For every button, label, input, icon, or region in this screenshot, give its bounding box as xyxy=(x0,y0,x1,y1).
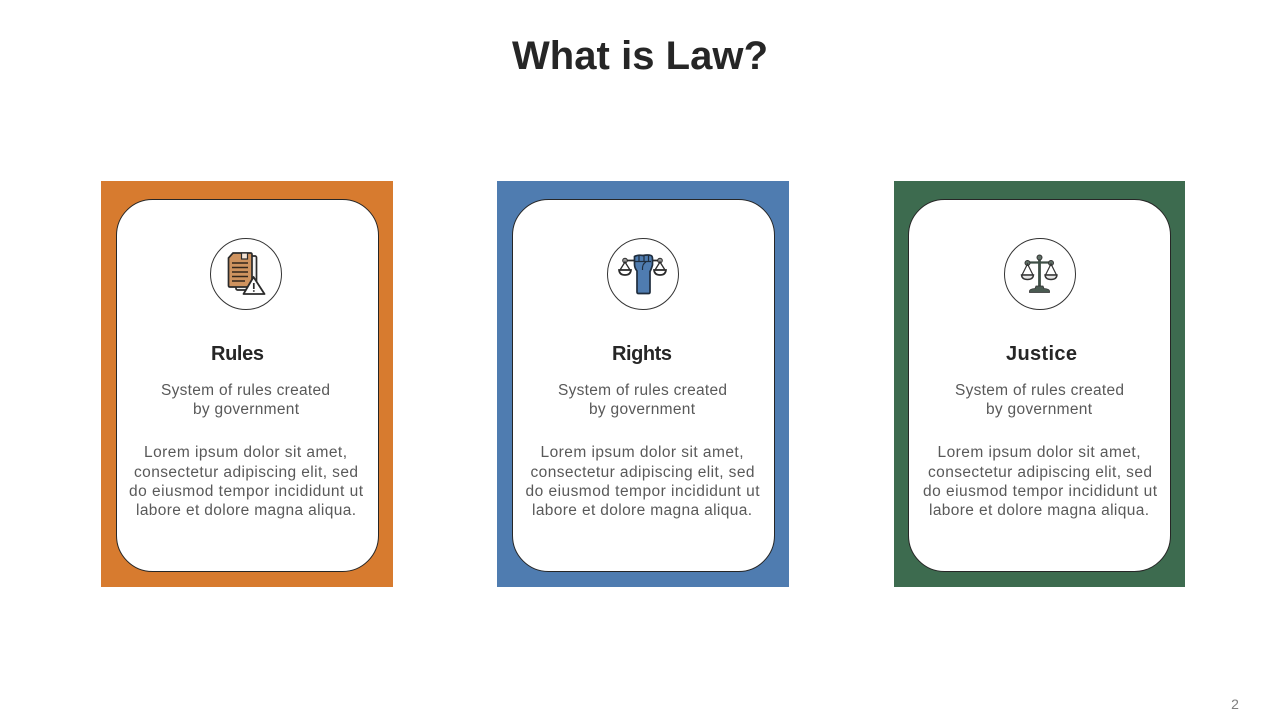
body text: justice: Lorem ipsum dolor sit amet, xyxy=(938,444,1140,461)
body text: rights: Lorem ipsum dolor sit amet, xyxy=(540,444,744,461)
heading: rights: Rights xyxy=(612,343,672,365)
page number: 2 xyxy=(1231,696,1239,712)
title: What is Law? xyxy=(512,34,768,78)
card frame: rights xyxy=(497,181,789,587)
card frame: justice xyxy=(894,181,1185,587)
subtitle: rules xyxy=(161,382,330,418)
card inner: rules xyxy=(116,200,378,572)
panel: justice xyxy=(894,181,1185,587)
heading: rules: Rules xyxy=(211,343,264,365)
card inner: justice xyxy=(908,200,1170,572)
panel: rights xyxy=(497,181,789,587)
body text: rights: labore et dolore magna aliqua. xyxy=(532,502,752,519)
body text: rights: do eiusmod tempor incididunt ut xyxy=(526,483,760,500)
body text: rules: labore et dolore magna aliqua. xyxy=(136,502,356,519)
body text: rules: do eiusmod tempor incididunt ut xyxy=(129,483,364,500)
subtitle: rules: System of rules created xyxy=(161,382,330,399)
panel: rules xyxy=(101,181,393,587)
heading: justice: Justice xyxy=(1006,343,1077,365)
body text: rules: Lorem ipsum dolor sit amet, xyxy=(144,444,347,461)
body text: justice xyxy=(923,444,1158,519)
body text: justice: consectetur adipiscing elit, sed xyxy=(928,464,1152,481)
card frame: rules xyxy=(101,181,393,587)
icon: fist with scales xyxy=(608,238,678,310)
subtitle: justice xyxy=(955,382,1124,418)
body text: justice: do eiusmod tempor incididunt ut xyxy=(923,483,1158,500)
icon: clipboard with warning xyxy=(210,238,282,310)
subtitle: rights xyxy=(558,382,727,418)
body text: justice: labore et dolore magna aliqua. xyxy=(929,502,1149,519)
subtitle: rights: System of rules created xyxy=(558,382,727,399)
card inner: rights xyxy=(512,200,774,572)
body text: rules: consectetur adipiscing elit, sed xyxy=(134,464,358,481)
body text: rules xyxy=(129,444,364,519)
subtitle: justice: by government xyxy=(986,401,1093,418)
body text: rights xyxy=(526,444,760,519)
subtitle: rules: by government xyxy=(193,401,300,418)
subtitle: justice: System of rules created xyxy=(955,382,1124,399)
body text: rights: consectetur adipiscing elit, sed xyxy=(530,464,754,481)
subtitle: rights: by government xyxy=(589,401,696,418)
icon: balance scale xyxy=(1004,238,1076,310)
